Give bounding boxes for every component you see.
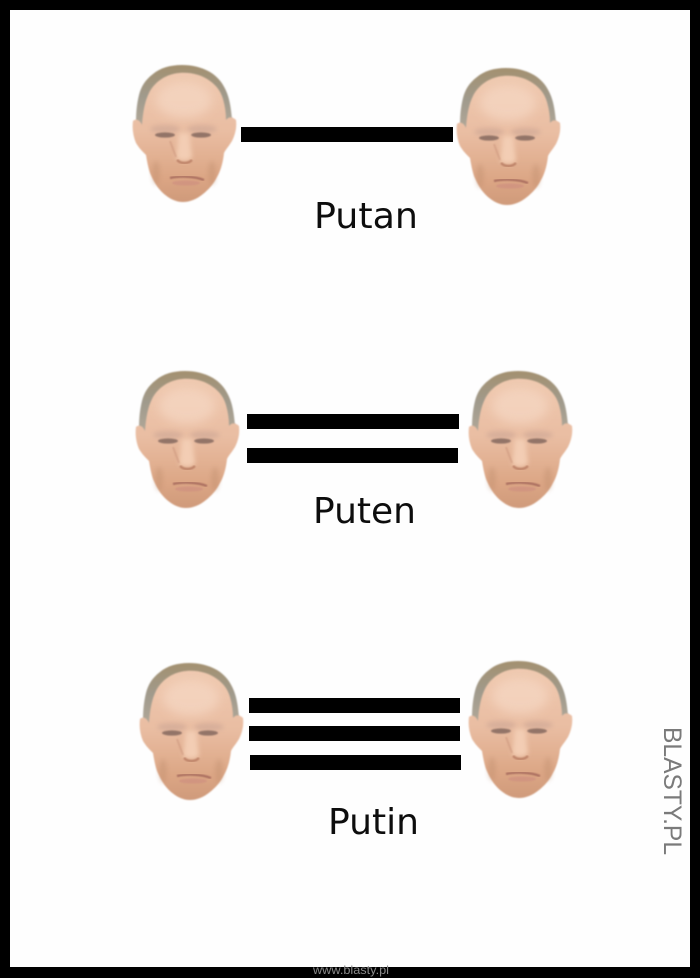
icon: right face, row 1 <box>457 68 560 205</box>
icon: left face, row 2 <box>136 371 239 508</box>
group: Putin row <box>140 661 572 843</box>
icon: right face, row 3 <box>469 661 572 798</box>
icon: left face, row 1 <box>133 65 236 202</box>
group: Putan row <box>133 65 560 237</box>
single bond bar <box>241 127 453 142</box>
label: Putan: Putan <box>314 196 418 237</box>
icon: left face, row 3 <box>140 663 243 800</box>
footer watermark: www.blasty.pl: www.blasty.pl <box>312 963 389 977</box>
double bond bars <box>247 414 459 463</box>
icon: right face, row 2 <box>469 371 572 508</box>
watermark: BLASTY.PL: BLASTY.PL <box>658 727 686 855</box>
triple bond bars <box>249 698 461 770</box>
group: Puten row <box>136 371 572 532</box>
label: Puten: Puten <box>313 491 416 532</box>
label: Putin: Putin <box>328 802 419 843</box>
